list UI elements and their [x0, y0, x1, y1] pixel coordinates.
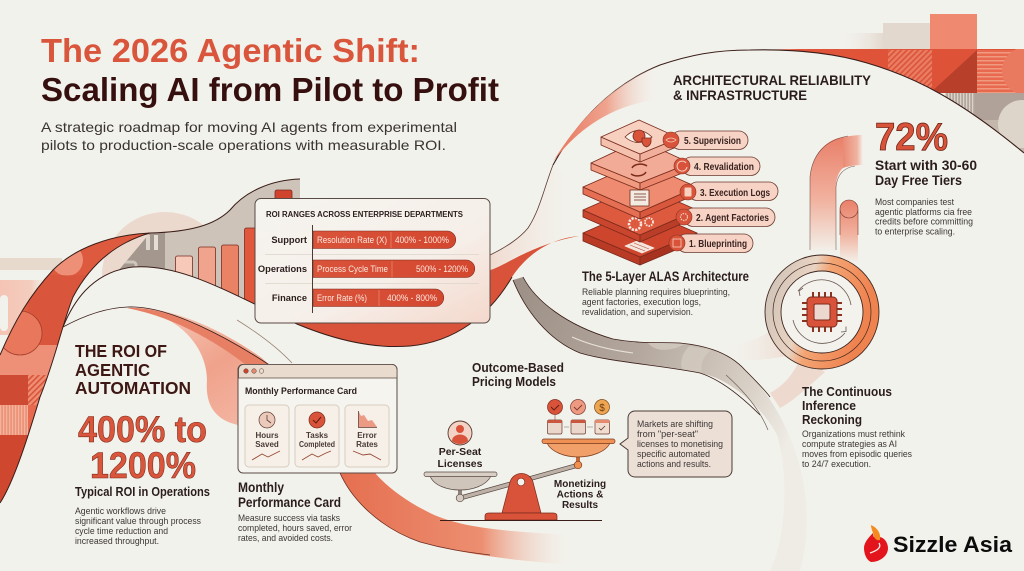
ribbon: top right red and grey	[772, 49, 1024, 152]
label: per-seat licenses: Per-Seat	[439, 446, 482, 458]
ribbon: beige with bar chart	[120, 180, 300, 304]
heading: outcome-based pricing	[472, 360, 564, 389]
heading: architectural reliability: ARCHITECTURAL RELIABILITY	[673, 72, 872, 88]
layer 5	[601, 120, 679, 162]
icon: flame	[864, 525, 888, 562]
text: monthly performance card	[238, 480, 352, 543]
text: typical ROI	[75, 485, 210, 546]
heading: ROI of agentic automation: AGENTIC	[75, 360, 150, 380]
ribbon edge beige	[150, 179, 300, 233]
stat: 400% to 1200%: 1200%	[90, 445, 196, 486]
grey ribbon lighter patch	[648, 343, 712, 373]
label: monetizing actions: Monetizing	[554, 479, 606, 490]
text: subtitle: pilots to production-scale operations with measurable ROI.	[41, 137, 446, 153]
text: continuous inference: Reckoning	[802, 412, 862, 427]
beam	[460, 463, 579, 500]
decorative blocks top right	[835, 14, 977, 50]
salmon arc	[127, 308, 277, 372]
row: support	[271, 231, 456, 248]
ribbon: salmon fade swoosh	[553, 65, 660, 162]
callout: market shift	[620, 411, 732, 477]
callout: market shift: Markets are shifting	[637, 419, 713, 429]
row: finance: 400% - 800%	[387, 293, 437, 303]
icon: per-seat person	[448, 421, 472, 445]
grey ribbon inner line	[726, 375, 768, 430]
tube: arch above ring	[810, 135, 863, 253]
text: 5-layer architecture: Reliable planning requires blueprinting,	[582, 287, 730, 297]
panel: monthly performance card	[238, 364, 397, 473]
text: continuous inference: The Continuous	[802, 384, 892, 399]
text: 5-layer architecture: agent factories, execution logs,	[582, 297, 701, 307]
text: typical ROI: Agentic workflows drive	[75, 506, 166, 516]
heading: title: Scaling AI from Pilot to Profit	[41, 71, 499, 108]
tile: tasks completed: Tasks	[306, 431, 329, 440]
text: free tiers: agentic platforms cia free	[875, 207, 972, 217]
label: monetizing actions: Results	[562, 500, 598, 511]
callout: market shift: from "per-seat"	[637, 429, 698, 439]
text: monthly performance card: Performance Card	[238, 495, 341, 510]
panel: ROI ranges table	[255, 198, 490, 323]
text: continuous inference: Inference	[802, 398, 856, 413]
ribbon edge left red	[0, 233, 150, 503]
ribbon: red under table	[260, 236, 579, 346]
icon: compute ring with chip	[765, 255, 879, 369]
text: typical ROI: increased throughput.	[75, 536, 159, 546]
text: monthly performance card: rates, and avoided costs.	[238, 533, 333, 543]
text: 5-layer architecture	[582, 269, 749, 317]
left background bands	[0, 258, 62, 335]
heading: ROI of agentic automation	[75, 341, 191, 398]
icon row: outcome checks and flow: $	[599, 403, 605, 414]
text: typical ROI: significant value through process	[75, 516, 201, 526]
icon: layered ALAS stack	[583, 120, 697, 265]
pill: 3 execution logs	[680, 182, 778, 200]
row: support: 400% - 1000%	[395, 235, 449, 245]
heading: ROI of agentic automation: AUTOMATION	[75, 378, 191, 398]
ribbon: grey	[513, 277, 807, 571]
text: continuous inference: compute strategies as AI	[802, 439, 897, 449]
window dots	[244, 369, 264, 373]
text: free tiers: Day Free Tiers	[875, 172, 962, 188]
left pan	[458, 488, 462, 496]
text: free tiers: to enterprise scaling.	[875, 226, 955, 236]
bottom arc edge	[340, 473, 490, 555]
layer 3	[583, 162, 697, 219]
text: monthly performance card: completed, hours saved, error	[238, 523, 352, 533]
base	[485, 513, 557, 520]
chip pins	[802, 292, 842, 332]
text: continuous inference: Organizations must rethink	[802, 429, 905, 439]
text: free tiers: credits before committing	[875, 216, 973, 226]
stat: 400% to 1200%: 400% to	[78, 409, 207, 450]
text: typical ROI: cycle time reduction and	[75, 526, 168, 536]
tile: hours saved	[245, 405, 289, 467]
label: per-seat licenses: Licenses	[438, 458, 483, 470]
pill: 5 supervision	[663, 131, 748, 150]
pill: 5 supervision: 5. Supervision	[684, 136, 741, 147]
pale ring tails	[720, 322, 825, 408]
layer 1	[583, 208, 697, 265]
white lens outline	[63, 267, 512, 347]
heading: title: The 2026 Agentic Shift:	[41, 32, 420, 69]
callout: market shift: specific automated	[637, 449, 710, 459]
pill: 3 execution logs: 3. Execution Logs	[700, 188, 770, 199]
grey ribbon highlights	[572, 337, 633, 353]
row: support: Resolution Rate (X)	[317, 235, 387, 245]
arc outline	[63, 307, 277, 370]
pill: 1 blueprinting: 1. Blueprinting	[689, 239, 747, 250]
logo: Sizzle Asia: Sizzle Asia	[893, 532, 1013, 557]
heading: title	[41, 32, 499, 108]
pill: 1 blueprinting	[669, 234, 753, 252]
pill: 4 revalidation	[674, 157, 760, 176]
pale circle behind bars	[102, 212, 228, 338]
text: continuous inference	[802, 384, 912, 469]
text: monthly performance card: Monthly	[238, 480, 284, 495]
heading: architectural reliability	[673, 72, 872, 103]
callout: market shift: licenses to monetising	[637, 439, 723, 449]
icon: balance scale	[424, 439, 615, 520]
tile: hours saved: Hours	[255, 431, 279, 440]
row: finance	[272, 289, 444, 306]
row dividers	[265, 254, 479, 284]
text: subtitle: A strategic roadmap for moving AI agents from experimental	[41, 119, 457, 135]
label: per-seat licenses	[438, 446, 483, 470]
pill: 4 revalidation: 4. Revalidation	[694, 162, 754, 173]
tile: hours saved: Saved	[255, 440, 279, 449]
label: monetizing actions	[554, 479, 606, 511]
row: finance: Finance	[272, 293, 307, 303]
row: operations: Operations	[258, 264, 307, 274]
text: free tiers	[875, 157, 977, 236]
text: free tiers: Most companies test	[875, 197, 954, 207]
stat: 72%: 72%	[875, 116, 948, 159]
window title bar	[238, 364, 397, 378]
tube: small pin	[840, 200, 858, 263]
grey ribbon lower edge	[513, 280, 760, 415]
axis line	[312, 225, 314, 313]
chip body	[807, 297, 837, 327]
text: free tiers: Start with 30-60	[875, 157, 977, 173]
text: continuous inference: to 24/7 execution.	[802, 459, 871, 469]
row: support: Support	[271, 235, 307, 245]
text: 5-layer architecture: The 5-Layer ALAS Architecture	[582, 269, 749, 284]
right pan	[576, 456, 580, 464]
tile: error rates: Error	[357, 431, 377, 440]
row: operations: 500% - 1200%	[416, 264, 468, 274]
layer 4	[591, 140, 690, 190]
heading: ROI of agentic automation: THE ROI OF	[75, 341, 167, 361]
tile: tasks completed	[295, 405, 339, 467]
heading: outcome-based pricing: Outcome-Based	[472, 360, 564, 375]
white lens	[0, 267, 512, 571]
icon row: outcome checks and flow	[548, 400, 610, 434]
ribbon: bottom arc	[340, 473, 575, 565]
ribbon pale fill descending to table	[490, 165, 585, 270]
row: operations	[258, 260, 475, 278]
heading: outcome-based pricing: Pricing Models	[472, 374, 556, 389]
callout: market shift: actions and results.	[637, 459, 711, 469]
ribbon edge top right	[553, 50, 1024, 165]
text: 5-layer architecture: revalidation, and supervision.	[582, 307, 693, 317]
layer 2	[583, 185, 697, 242]
tile: error rates	[345, 405, 389, 467]
grey ribbon edge	[523, 277, 770, 397]
logo: Sizzle Asia	[864, 525, 1013, 562]
bar chart	[175, 190, 292, 304]
tile: tasks completed: Completed	[299, 440, 335, 449]
row: finance: Error Rate (%)	[317, 293, 367, 303]
fulcrum	[502, 473, 541, 513]
row: operations: Process Cycle Time	[317, 264, 388, 274]
ribbon outline to table	[490, 165, 553, 255]
table title: ROI RANGES ACROSS ENTERPRISE DEPARTMENTS	[266, 209, 463, 219]
text: continuous inference: moves from episodic queries	[802, 449, 912, 459]
heading: architectural reliability: & INFRASTRUCTURE	[673, 87, 807, 103]
label: monetizing actions: Actions &	[557, 490, 603, 500]
salmon blob behind ROI heading	[127, 308, 300, 425]
tan thin line	[237, 320, 292, 363]
pill: 2 agent factories	[676, 208, 775, 226]
text: monthly performance card: Measure success via tasks	[238, 513, 340, 523]
stat: 400% to 1200%	[78, 409, 207, 486]
text: typical ROI: Typical ROI in Operations	[75, 485, 210, 499]
ribbon: left red	[0, 234, 146, 502]
pill: 2 agent factories: 2. Agent Factories	[696, 213, 769, 224]
text: subtitle	[41, 119, 457, 153]
tile: error rates: Rates	[356, 440, 378, 449]
card title: Monthly Performance Card	[245, 386, 357, 397]
